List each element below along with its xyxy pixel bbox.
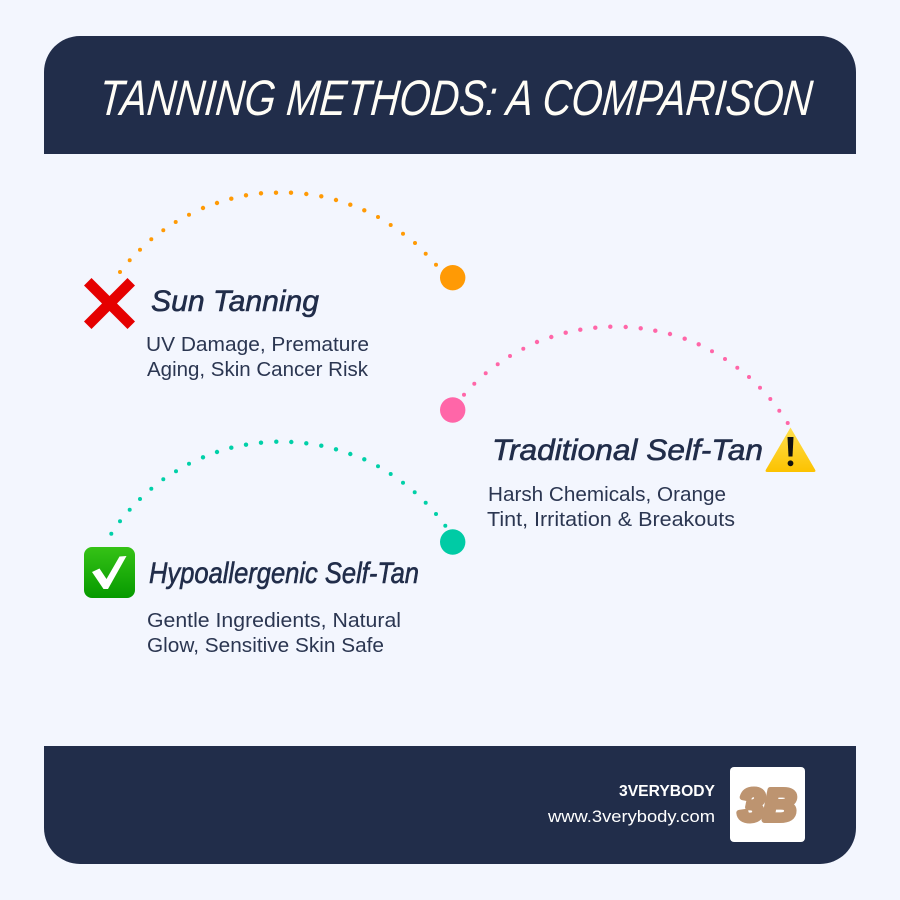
footer band: [44, 746, 856, 864]
logo: 3B: [739, 781, 796, 830]
text: traditional self-tan effects: Harsh Chemicals, Orange: [488, 484, 726, 506]
node: pink: [440, 397, 465, 423]
dotted arc: pink: [462, 324, 790, 425]
heading: sun tanning: Sun Tanning: [151, 285, 319, 318]
text: hypoallergenic effects: Gentle Ingredients, Natural: [147, 610, 401, 632]
text: sun tanning effects: UV Damage, Premature: [146, 334, 369, 356]
node: green: [440, 529, 465, 555]
panel: hypoallergenic self-tan: [84, 440, 465, 657]
node: orange: [440, 265, 465, 290]
heading: hypoallergenic self-tan: Hypoallergenic Self-Tan: [149, 557, 419, 590]
heading: traditional self-tan: Traditional Self-Tan: [492, 434, 763, 467]
dotted arc: orange: [118, 190, 438, 274]
website: www.3verybody.com: [547, 807, 715, 826]
panel: sun tanning: [84, 190, 465, 381]
icon: warning triangle: [766, 428, 816, 472]
text: hypoallergenic effects: Glow, Sensitive Skin Safe: [147, 635, 384, 657]
text: sun tanning effects: Aging, Skin Cancer Risk: [147, 359, 369, 381]
header band: [44, 36, 856, 154]
dotted arc: green: [109, 440, 447, 536]
panel: traditional self-tan: [440, 324, 816, 531]
icon: green check: [84, 547, 135, 598]
text: traditional self-tan effects: Tint, Irritation & Breakouts: [487, 509, 735, 531]
brand name: 3VERYBODY: [619, 783, 716, 800]
logo: [730, 767, 805, 842]
icon: red cross: [84, 278, 135, 329]
